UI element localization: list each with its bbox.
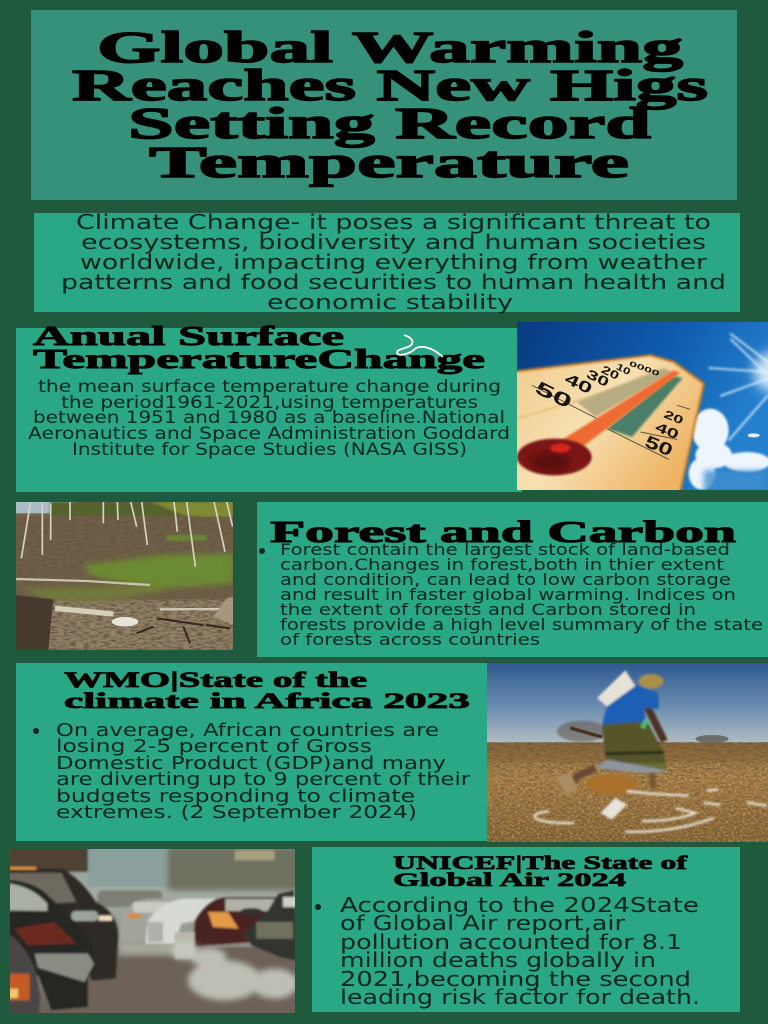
road (87, 946, 295, 1002)
blue shirt (602, 685, 659, 725)
gray tick band (577, 368, 672, 417)
bulb (517, 439, 592, 475)
body text: forest and carbon: and condition, can lead to low carbon storage (280, 570, 731, 589)
intro text: worldwide, impacting everything from weather (80, 250, 708, 274)
intro text: patterns and food securities to human health and (61, 270, 726, 294)
body text: temperature change: Aeronautics and Space Administration Goddard (28, 424, 510, 443)
sack (597, 670, 635, 709)
body text: Africa: are diverting up to 9 percent of their (56, 770, 471, 790)
red mercury line (550, 370, 680, 447)
body text: forest and carbon (280, 540, 763, 649)
body text: air pollution: pollution accounted for 8.1 (340, 930, 682, 954)
foreground soil (48, 599, 233, 650)
title: Global Warming (97, 23, 683, 72)
scale numbers: 50 (532, 377, 576, 412)
panel: WMO state of the climate in Africa (16, 663, 488, 841)
body text: Africa: On average, African countries are (56, 721, 439, 741)
body text: Africa: losing 2-5 percent of Gross (56, 737, 372, 757)
panel: UNICEF state of global air (312, 847, 740, 1012)
photo: thermometer against sunny sky: 40 (562, 370, 595, 398)
heading: UNICEF state of global air: UNICEF|The State of (393, 853, 688, 874)
body text: Africa: Domestic Product (GDP)and many (56, 754, 446, 774)
panel: forest and carbon (257, 502, 768, 657)
title: Setting Record (128, 99, 651, 148)
head wrap (638, 674, 664, 689)
intro text: economic stability (267, 290, 513, 314)
body text: Africa: extremes. (2 September 2024) (56, 803, 417, 823)
thermometer body (517, 355, 704, 490)
clouds (689, 409, 768, 490)
body text: temperature change: the mean surface temperature change during (38, 377, 501, 396)
body text: air pollution (340, 893, 700, 1009)
title panel (31, 10, 737, 200)
heading: UNICEF state of global air (393, 853, 688, 891)
photo: cars and exhaust smog (10, 849, 295, 1013)
heading: WMO state of the climate in Africa: WMO|State of the (64, 667, 367, 692)
photo: thermometer against sunny sky: 20 (599, 364, 621, 383)
body text: forest and carbon: the extent of forests and Carbon stored in (280, 600, 696, 619)
bones (535, 790, 767, 832)
heading: annual surface temperature change (33, 321, 485, 374)
dark rear car (5, 869, 119, 981)
carcass (586, 775, 638, 795)
body text: temperature change: Institute for Space Studies (NASA GISS) (72, 440, 467, 459)
bullet (33, 728, 39, 734)
photo: thermometer against sunny sky: 0000 (628, 359, 661, 378)
body text: forest and carbon: and result in faster global warming. Indices on (280, 585, 736, 604)
near-left car (5, 930, 41, 1020)
heading: annual surface temperature change: TemperatureChange (33, 344, 485, 374)
body text: air pollution: 2021,becoming the second (340, 967, 691, 991)
red car (193, 897, 278, 947)
distant tree line (16, 502, 76, 513)
ground texture (16, 517, 233, 650)
intro text: ecosystems, biodiversity and human societies (81, 230, 706, 254)
photo: thermometer against sunny sky: 20 (662, 409, 685, 427)
branches (137, 618, 230, 643)
photo: thermometer against sunny sky: 40 (653, 419, 681, 442)
title: Temperature (149, 138, 629, 187)
intro text: Climate Change- it poses a significant threat to (76, 210, 711, 234)
white car (145, 899, 215, 944)
bare trunks (21, 502, 233, 567)
body text: forest and carbon: forests provide a high level summary of the state (280, 615, 763, 634)
street buildings (10, 849, 89, 874)
arm (647, 706, 664, 741)
title: Reaches New Higs (72, 61, 708, 110)
body text: air pollution: million deaths globally in (340, 948, 656, 972)
silver car (120, 898, 163, 942)
photo: person walking on drought land (487, 663, 768, 843)
green clearing (83, 553, 233, 590)
ground texture (487, 742, 768, 843)
photo: thermometer against sunny sky (517, 322, 768, 492)
body text: air pollution: leading risk factor for death. (340, 985, 700, 1009)
long scale lines (532, 385, 690, 459)
body text: forest and carbon: Forest contain the largest stock of land-based (280, 540, 730, 559)
sun glow (754, 352, 768, 392)
heading: annual surface temperature change: Anual Surface (33, 321, 344, 351)
close dark car (5, 880, 94, 1010)
photo: thermometer against sunny sky: 10 (614, 361, 632, 377)
icon: white squiggle (397, 335, 443, 357)
body text: Africa (56, 721, 471, 823)
dark right car (243, 890, 301, 962)
skirt (602, 721, 666, 770)
exhaust smoke (171, 941, 298, 1000)
photo: thermometer against sunny sky: 30 (584, 366, 612, 390)
photo: thermometer against sunny sky: 50 (642, 431, 676, 460)
green tick band (607, 376, 683, 437)
body text: temperature change: between 1951 and 1980 as a baseline.National (33, 408, 505, 427)
body text: Africa: budgets responding to climate (56, 787, 415, 807)
fallen logs (16, 579, 150, 585)
distant car (97, 890, 162, 907)
heading: UNICEF state of global air: Global Air 2024 (393, 870, 627, 891)
body text: forest and carbon: of forests across countries (280, 630, 540, 649)
woman figure (535, 670, 767, 832)
heading: WMO state of the climate in Africa (64, 667, 470, 713)
bullet (315, 904, 321, 910)
heading: WMO state of the climate in Africa: climate in Africa 2023 (64, 688, 470, 713)
stumps (16, 595, 53, 650)
distant bushes (557, 721, 607, 742)
bullet (259, 548, 265, 554)
cloth and legs (594, 760, 666, 774)
body text: temperature change: the period1961-2021,using temperatures (61, 393, 478, 412)
body text: forest and carbon: carbon.Changes in forest,both in thier extent (280, 555, 724, 574)
heading: forest and carbon: Forest and Carbon (270, 514, 736, 549)
body text: temperature change (28, 377, 510, 459)
title (72, 23, 708, 187)
body text: air pollution: of Global Air report,air (340, 911, 626, 935)
panel: annual surface temperature change (16, 321, 522, 492)
intro text (61, 210, 726, 314)
body text: air pollution: According to the 2024State (340, 893, 699, 917)
photo: cleared forest hillside (16, 502, 233, 650)
green tag (640, 719, 649, 729)
panel: intro (34, 210, 740, 314)
